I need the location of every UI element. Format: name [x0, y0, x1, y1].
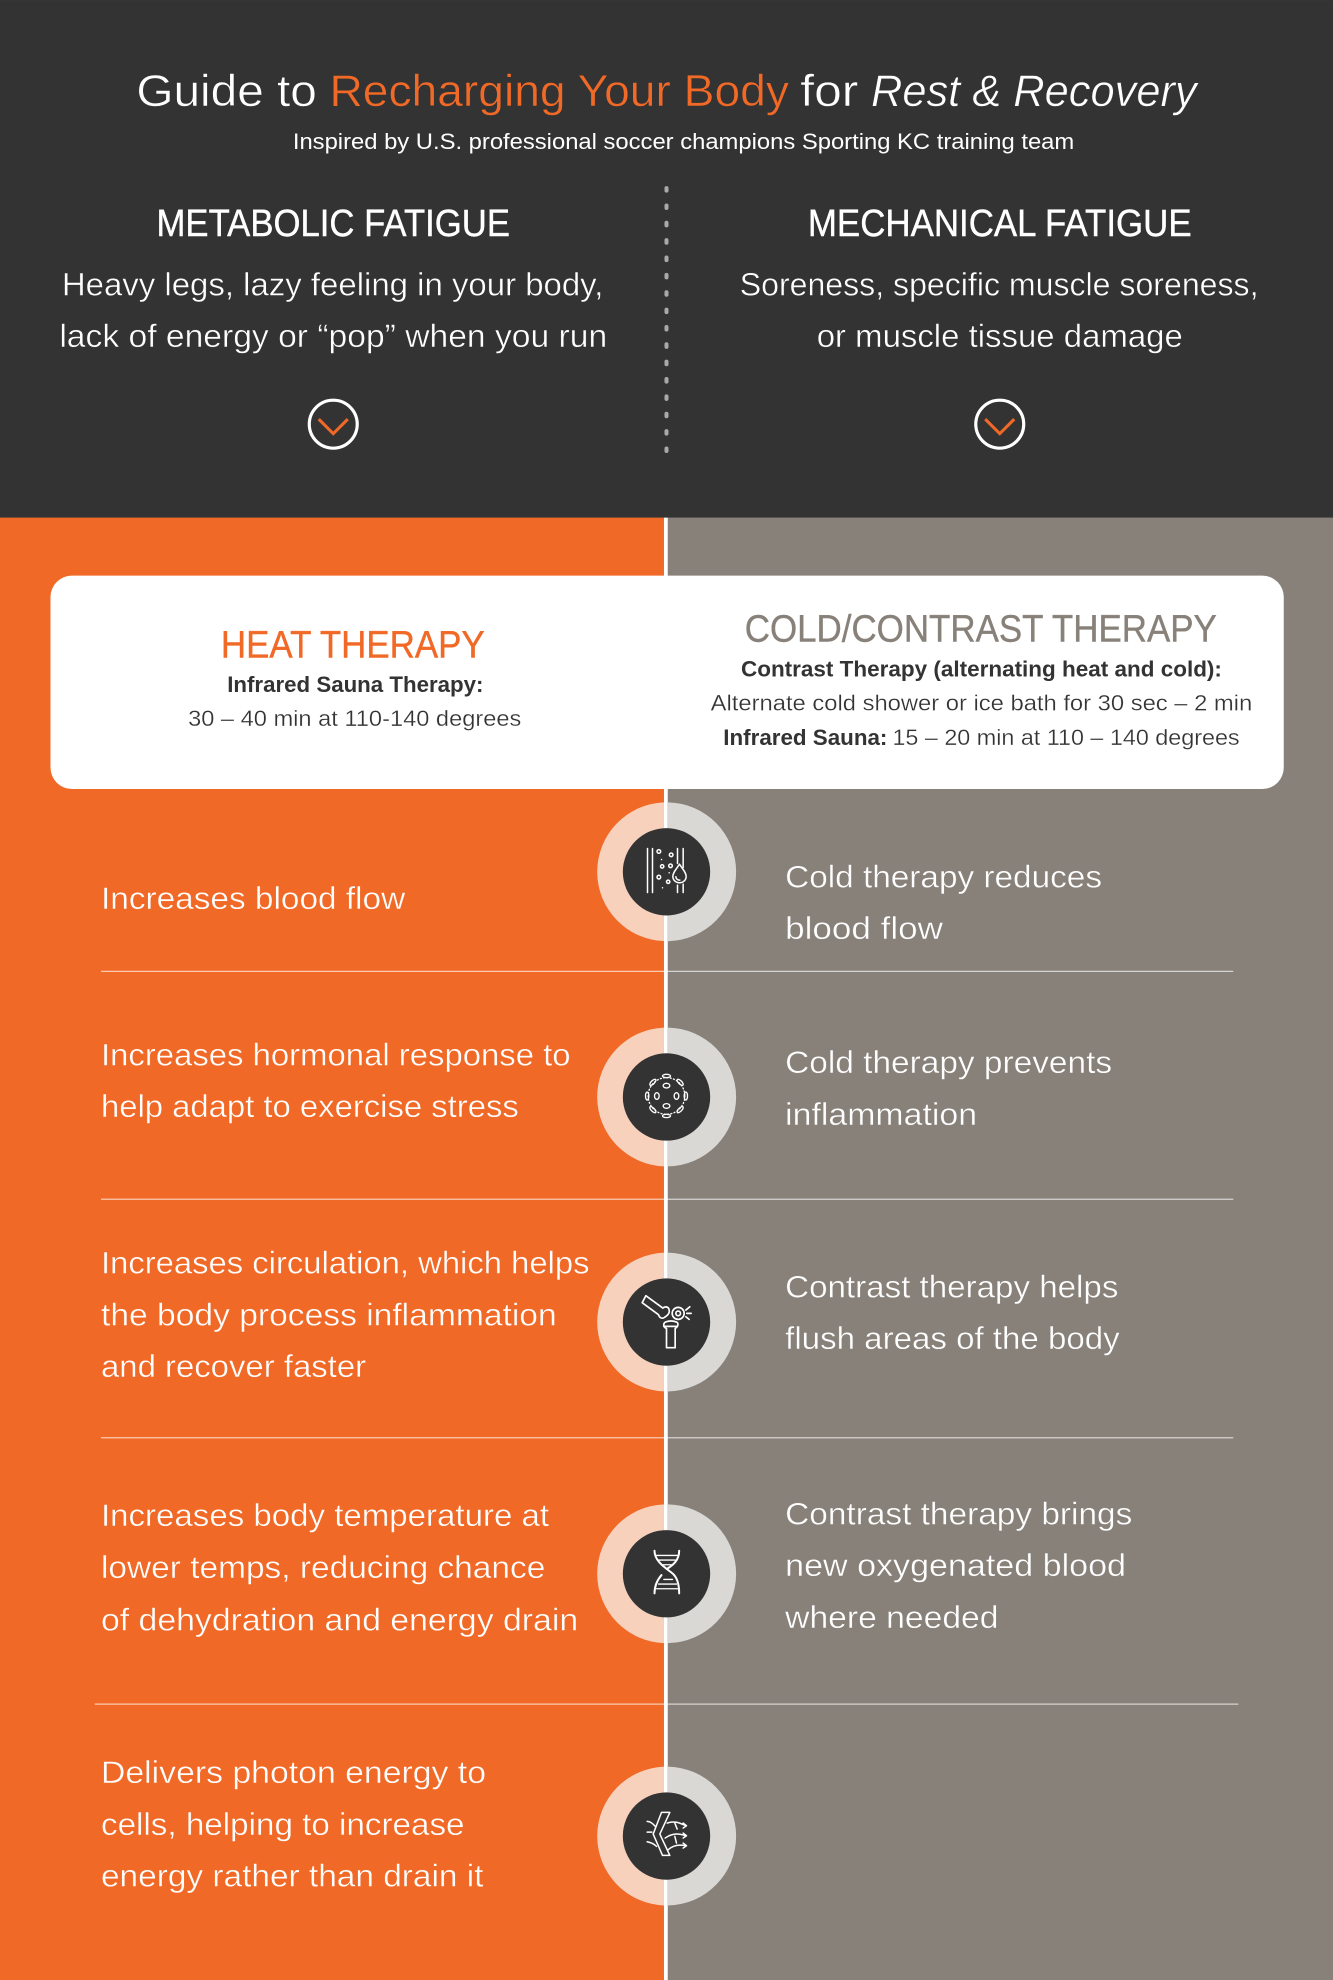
text: infrared sauna therapy: Infrared Sauna Therapy:: [227, 672, 483, 697]
text: cold benefit 3: flush areas of the body: [785, 1320, 1120, 1356]
icon: knee joint: [597, 1253, 736, 1391]
text: contrast therapy details: 15 – 20 min at 110 – 140 degrees: [892, 725, 1240, 750]
text: contrast therapy details: Alternate cold shower or ice bath for 30 sec – 2 min: [711, 691, 1252, 716]
text: heat benefit 3: the body process inflammation: [101, 1296, 557, 1332]
text: contrast therapy details: [711, 657, 1252, 750]
icon: cell with receptors: [597, 1028, 736, 1166]
text: heat benefit 3: and recover faster: [101, 1348, 366, 1384]
text: heat benefit 1: Increases blood flow: [101, 880, 405, 916]
text: cold benefit 4: Contrast therapy brings: [785, 1495, 1132, 1531]
icon: down chevron mechanical: [976, 400, 1024, 448]
title: Guide to: [136, 67, 317, 116]
text: mechanical fatigue description: or muscle tissue damage: [817, 317, 1183, 354]
text: metabolic fatigue description: lack of energy or “pop” when you run: [59, 317, 607, 354]
text: cold benefit 4: where needed: [784, 1599, 998, 1635]
panel: cold side background: [668, 518, 1333, 1980]
text: contrast therapy details: Contrast Therapy (alternating heat and cold):: [741, 657, 1222, 682]
text: infrared sauna therapy: [188, 672, 521, 731]
text: cold benefit 2: Cold therapy prevents: [785, 1044, 1112, 1080]
text: heat benefit 5: cells, helping to increase: [101, 1806, 465, 1842]
text: heat benefit 4: lower temps, reducing chance: [101, 1549, 545, 1585]
text: heat benefit 4: [101, 1497, 578, 1637]
title: for: [800, 67, 858, 116]
heading: mechanical fatigue: MECHANICAL FATIGUE: [808, 203, 1192, 245]
text: cold benefit 1: blood flow: [785, 910, 943, 946]
icon: down chevron metabolic: [309, 400, 357, 448]
subtitle: Inspired by U.S. professional soccer champions Sporting KC training team: [293, 129, 1074, 154]
text: cold benefit 1: Cold therapy reduces: [785, 858, 1102, 894]
text: metabolic fatigue description: [59, 265, 607, 354]
text: cold benefit 3: [785, 1269, 1120, 1356]
text: contrast therapy details: Infrared Sauna:: [723, 725, 887, 750]
heading: heat therapy: HEAT THERAPY: [221, 625, 485, 667]
text: heat benefit 3: Increases circulation, which helps: [101, 1245, 589, 1281]
text: heat benefit 5: [101, 1754, 486, 1894]
text: heat benefit 4: of dehydration and energy drain: [101, 1601, 578, 1637]
icon: membrane with arrows: [597, 1767, 736, 1905]
heading: metabolic fatigue: METABOLIC FATIGUE: [157, 203, 510, 245]
text: heat benefit 4: Increases body temperature at: [101, 1497, 549, 1533]
title: [136, 67, 1200, 116]
heading: cold contrast therapy: COLD/CONTRAST THERAPY: [745, 608, 1217, 650]
text: cold benefit 2: inflammation: [785, 1096, 977, 1132]
text: heat benefit 5: Delivers photon energy to: [101, 1754, 486, 1790]
text: heat benefit 2: [101, 1036, 571, 1124]
icon: blood vessel and droplet: [597, 802, 736, 941]
title: Recharging Your Body: [329, 67, 789, 116]
text: mechanical fatigue description: Soreness, specific muscle soreness,: [740, 265, 1259, 302]
panel: dark header: [0, 0, 1333, 518]
text: cold benefit 1: [785, 858, 1102, 946]
icon: dna helix: [597, 1504, 736, 1643]
text: heat benefit 2: help adapt to exercise stress: [101, 1088, 519, 1124]
panel: heat side background: [0, 518, 664, 1980]
text: cold benefit 3: Contrast therapy helps: [785, 1269, 1118, 1305]
text: heat benefit 5: energy rather than drain it: [101, 1858, 484, 1894]
text: cold benefit 4: [784, 1495, 1132, 1635]
text: cold benefit 2: [785, 1044, 1112, 1132]
text: infrared sauna therapy: 30 – 40 min at 110-140 degrees: [188, 706, 521, 731]
text: heat benefit 3: [101, 1245, 589, 1384]
text: mechanical fatigue description: [740, 265, 1259, 354]
text: metabolic fatigue description: Heavy legs, lazy feeling in your body,: [62, 265, 603, 302]
text: heat benefit 2: Increases hormonal response to: [101, 1036, 571, 1072]
panel: therapy card: [50, 576, 1284, 789]
text: cold benefit 4: new oxygenated blood: [785, 1547, 1126, 1583]
title: Rest & Recovery: [871, 67, 1200, 116]
